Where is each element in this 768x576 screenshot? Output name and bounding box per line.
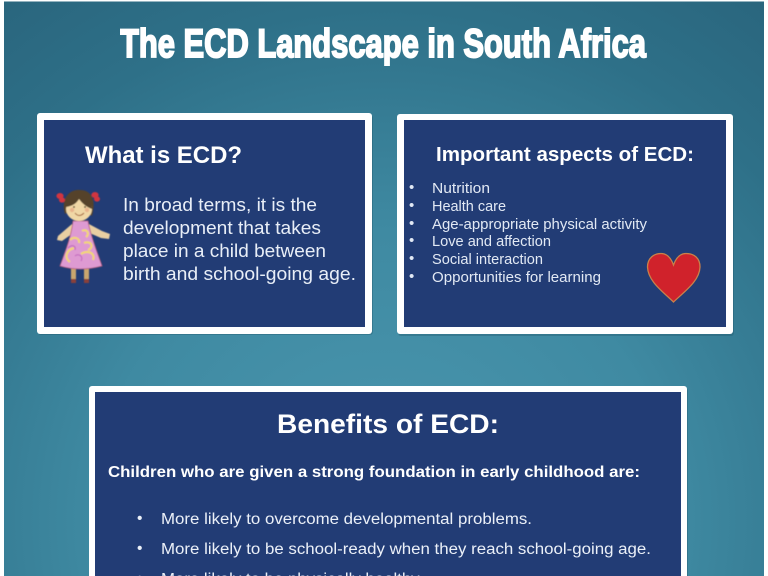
list: aspects: Health care	[432, 198, 506, 215]
list: aspects: •	[409, 215, 414, 232]
text block: definition: In broad terms, it is the	[123, 194, 317, 215]
list: benefits: •	[137, 510, 142, 527]
panel: important aspects	[397, 114, 734, 336]
icon: heart	[648, 254, 700, 302]
text block: definition: birth and school-going age.	[123, 263, 356, 284]
heading: important aspects: Important aspects of ECD:	[436, 144, 694, 166]
list: aspects: Social interaction	[432, 251, 543, 268]
intro sentence: Children who are given a strong foundation in early childhood are:	[108, 464, 640, 481]
list: aspects: •	[409, 232, 414, 249]
list: aspects: Age-appropriate physical activity	[432, 216, 647, 233]
list: benefits: More likely to be school-ready when they reach school-going age.	[161, 541, 651, 558]
list: aspects: •	[409, 197, 414, 214]
list: aspects	[409, 179, 647, 286]
heading: benefits: Benefits of ECD:	[277, 409, 499, 439]
list: aspects: Love and affection	[432, 233, 551, 250]
list: aspects: Nutrition	[432, 180, 490, 197]
panel: benefits	[89, 386, 688, 576]
list: aspects: •	[409, 179, 414, 196]
heading: what is ECD: What is ECD?	[85, 142, 242, 169]
list: aspects: Opportunities for learning	[432, 269, 601, 286]
panel: what is ECD	[37, 113, 373, 335]
list: benefits: •	[137, 540, 142, 557]
list: benefits	[137, 510, 651, 576]
text block: definition	[123, 194, 356, 284]
list: aspects: •	[409, 250, 414, 267]
text block: definition: development that takes	[123, 217, 321, 238]
list: aspects: •	[409, 268, 414, 285]
text block: definition: place in a child between	[123, 240, 326, 261]
list: benefits: More likely to overcome developmental problems.	[161, 511, 532, 528]
icon: cartoon girl	[56, 190, 110, 283]
